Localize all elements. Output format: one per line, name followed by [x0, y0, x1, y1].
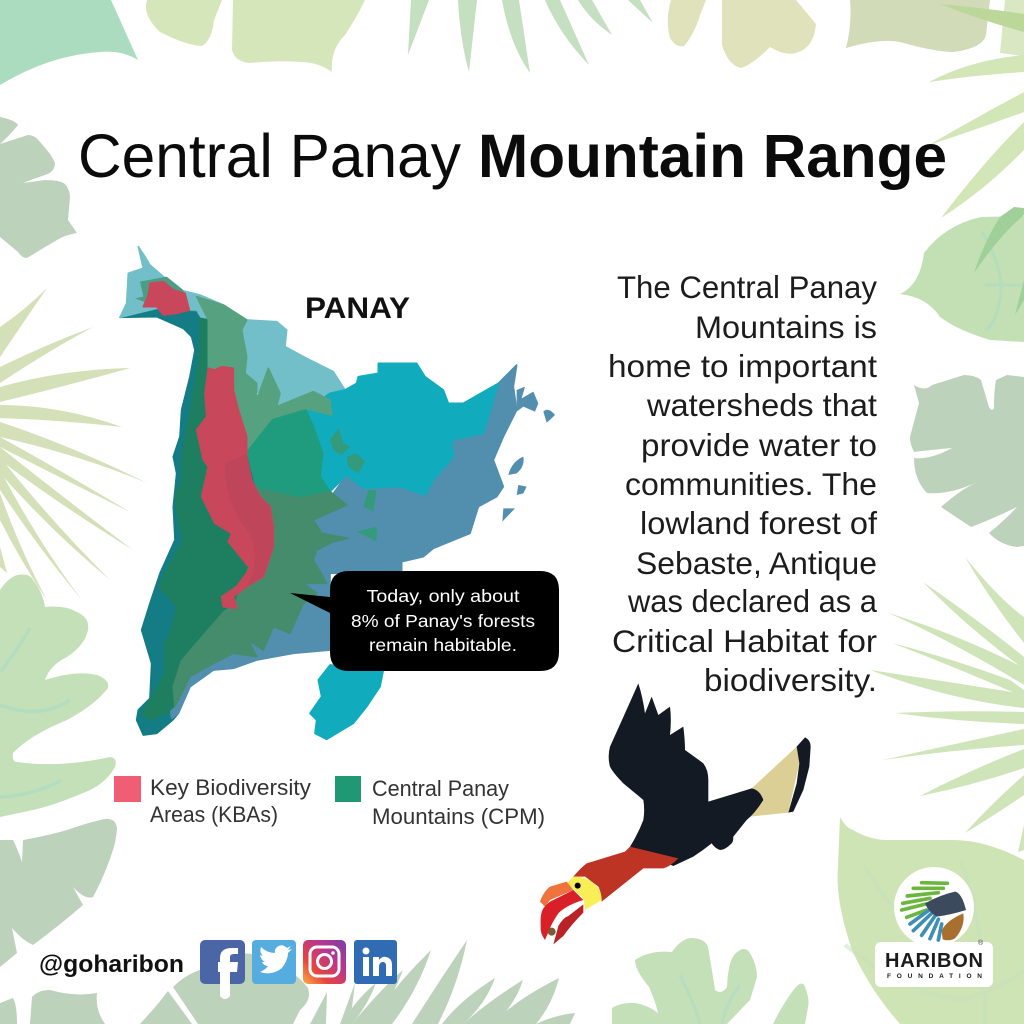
leaf: bottom-left small	[0, 990, 105, 1024]
leaf veins: bottom-right	[845, 860, 1024, 1024]
leaf: bottom green oak	[612, 938, 757, 1024]
icon: hornbill bird	[540, 683, 811, 944]
logo blue feathers	[910, 911, 942, 940]
leaf veins: left lower	[0, 628, 70, 797]
callout text: Today, only about	[366, 586, 520, 606]
leaf: left monstera upper	[0, 117, 77, 258]
region: southern medium green	[172, 488, 348, 707]
legend swatch: CPM	[335, 776, 361, 802]
description paragraph	[608, 269, 877, 698]
leaf veins: right	[982, 232, 1024, 330]
logo artwork	[902, 883, 966, 940]
palm blade: corner dark	[940, 4, 1024, 32]
bird food	[548, 928, 556, 936]
leaf: left lower light green	[0, 575, 116, 817]
legend label: KBA line 2: Areas (KBAs)	[150, 802, 278, 827]
description paragraph: Sebaste, Antique	[636, 545, 877, 581]
leaf: left lower monstera	[0, 819, 117, 967]
social handle: @goharibon	[39, 951, 184, 978]
islets	[502, 387, 555, 522]
region: central green	[247, 408, 330, 498]
map of Panay	[120, 247, 555, 739]
description paragraph: lowland forest of	[640, 505, 877, 541]
region: west coast dark teal	[120, 308, 267, 735]
region: north tip KBA	[143, 282, 189, 315]
social icons	[200, 940, 397, 999]
region: western dark green	[142, 318, 250, 720]
callout	[290, 571, 559, 671]
leaves: top khaki	[668, 0, 816, 68]
KBA overlap band	[225, 453, 273, 587]
bird tail tan	[750, 747, 799, 817]
description paragraph: provide water to	[641, 427, 877, 463]
leaf: bottom monstera	[140, 953, 309, 1024]
logo: Haribon Foundation	[875, 867, 993, 987]
region: north tip green	[135, 277, 200, 312]
logo registered mark: ®	[978, 939, 984, 947]
palm: right lower fan	[870, 557, 1024, 852]
palm: right upper blades	[929, 55, 1024, 218]
icon: twitter	[252, 940, 296, 984]
description paragraph: biodiversity.	[704, 662, 877, 698]
legend swatch: KBA	[114, 776, 141, 802]
description paragraph: communities. The	[625, 466, 877, 502]
callout bubble	[290, 571, 559, 671]
region: northern light teal	[120, 247, 345, 407]
bird eye	[575, 883, 581, 889]
description paragraph: watersheds that	[646, 387, 877, 423]
bird tail tip	[788, 737, 811, 813]
logo circle	[894, 867, 974, 947]
bird upper bill	[541, 890, 583, 940]
patches: green inside cyan	[330, 428, 377, 542]
logo brown wing	[942, 913, 964, 940]
bird neck	[573, 847, 678, 902]
leaf: right monstera	[910, 375, 1024, 547]
leaf veins: bottom green	[680, 975, 740, 1024]
leaf: right light green	[900, 216, 1024, 342]
icon: linkedin	[354, 940, 397, 984]
logo green feathers	[902, 883, 947, 917]
icon: instagram	[303, 940, 346, 984]
logo subtitle: FOUNDATION	[887, 973, 982, 980]
icon: facebook	[200, 940, 245, 999]
callout text	[351, 586, 535, 655]
palm: left fan	[0, 288, 147, 600]
leaf: top-left teal	[0, 0, 138, 85]
region: main KBA	[197, 367, 273, 608]
leaf: bottom green tip	[773, 984, 809, 1024]
logo bird head	[925, 892, 966, 917]
palm blade: right dark overlay	[974, 207, 1024, 315]
legend	[114, 775, 545, 829]
title: Central Panay	[78, 122, 461, 190]
bird casque	[540, 882, 573, 907]
legend label: CPM line 1: Central Panay	[372, 776, 510, 801]
callout text: remain habitable.	[369, 635, 517, 655]
palm: bottom fronds	[310, 940, 575, 1024]
palm: top fronds	[408, 0, 653, 73]
leaf: top-right corner	[1000, 0, 1024, 56]
region: south island cyan	[310, 665, 383, 739]
description paragraph: home to important	[608, 348, 877, 384]
description paragraph: The Central Panay	[617, 269, 877, 305]
legend label: CPM line 2: Mountains (CPM)	[372, 804, 545, 829]
logo wordmark: HARIBON	[885, 950, 983, 972]
bird lower bill	[553, 904, 583, 944]
region: northeast cyan	[305, 363, 498, 495]
bird body and wing	[609, 683, 763, 866]
leaves: top pale green	[146, 0, 365, 72]
title bold part: Mountain Range	[478, 122, 947, 190]
leaf: bottom-right large	[838, 817, 1024, 1024]
region: northern light green	[197, 297, 332, 460]
legend label: KBA line 1: Key Biodiversity	[150, 775, 312, 800]
map label: PANAY	[305, 292, 410, 325]
logo wordmark panel	[875, 942, 993, 987]
region: southeast blue	[167, 365, 517, 718]
callout text: 8% of Panay's forests	[351, 611, 535, 631]
description paragraph: Critical Habitat for	[612, 623, 877, 659]
bird face	[567, 877, 602, 910]
description paragraph: Mountains is	[695, 309, 877, 345]
leaf: top-right olive	[846, 0, 990, 52]
description paragraph: was declared as a	[627, 583, 877, 619]
